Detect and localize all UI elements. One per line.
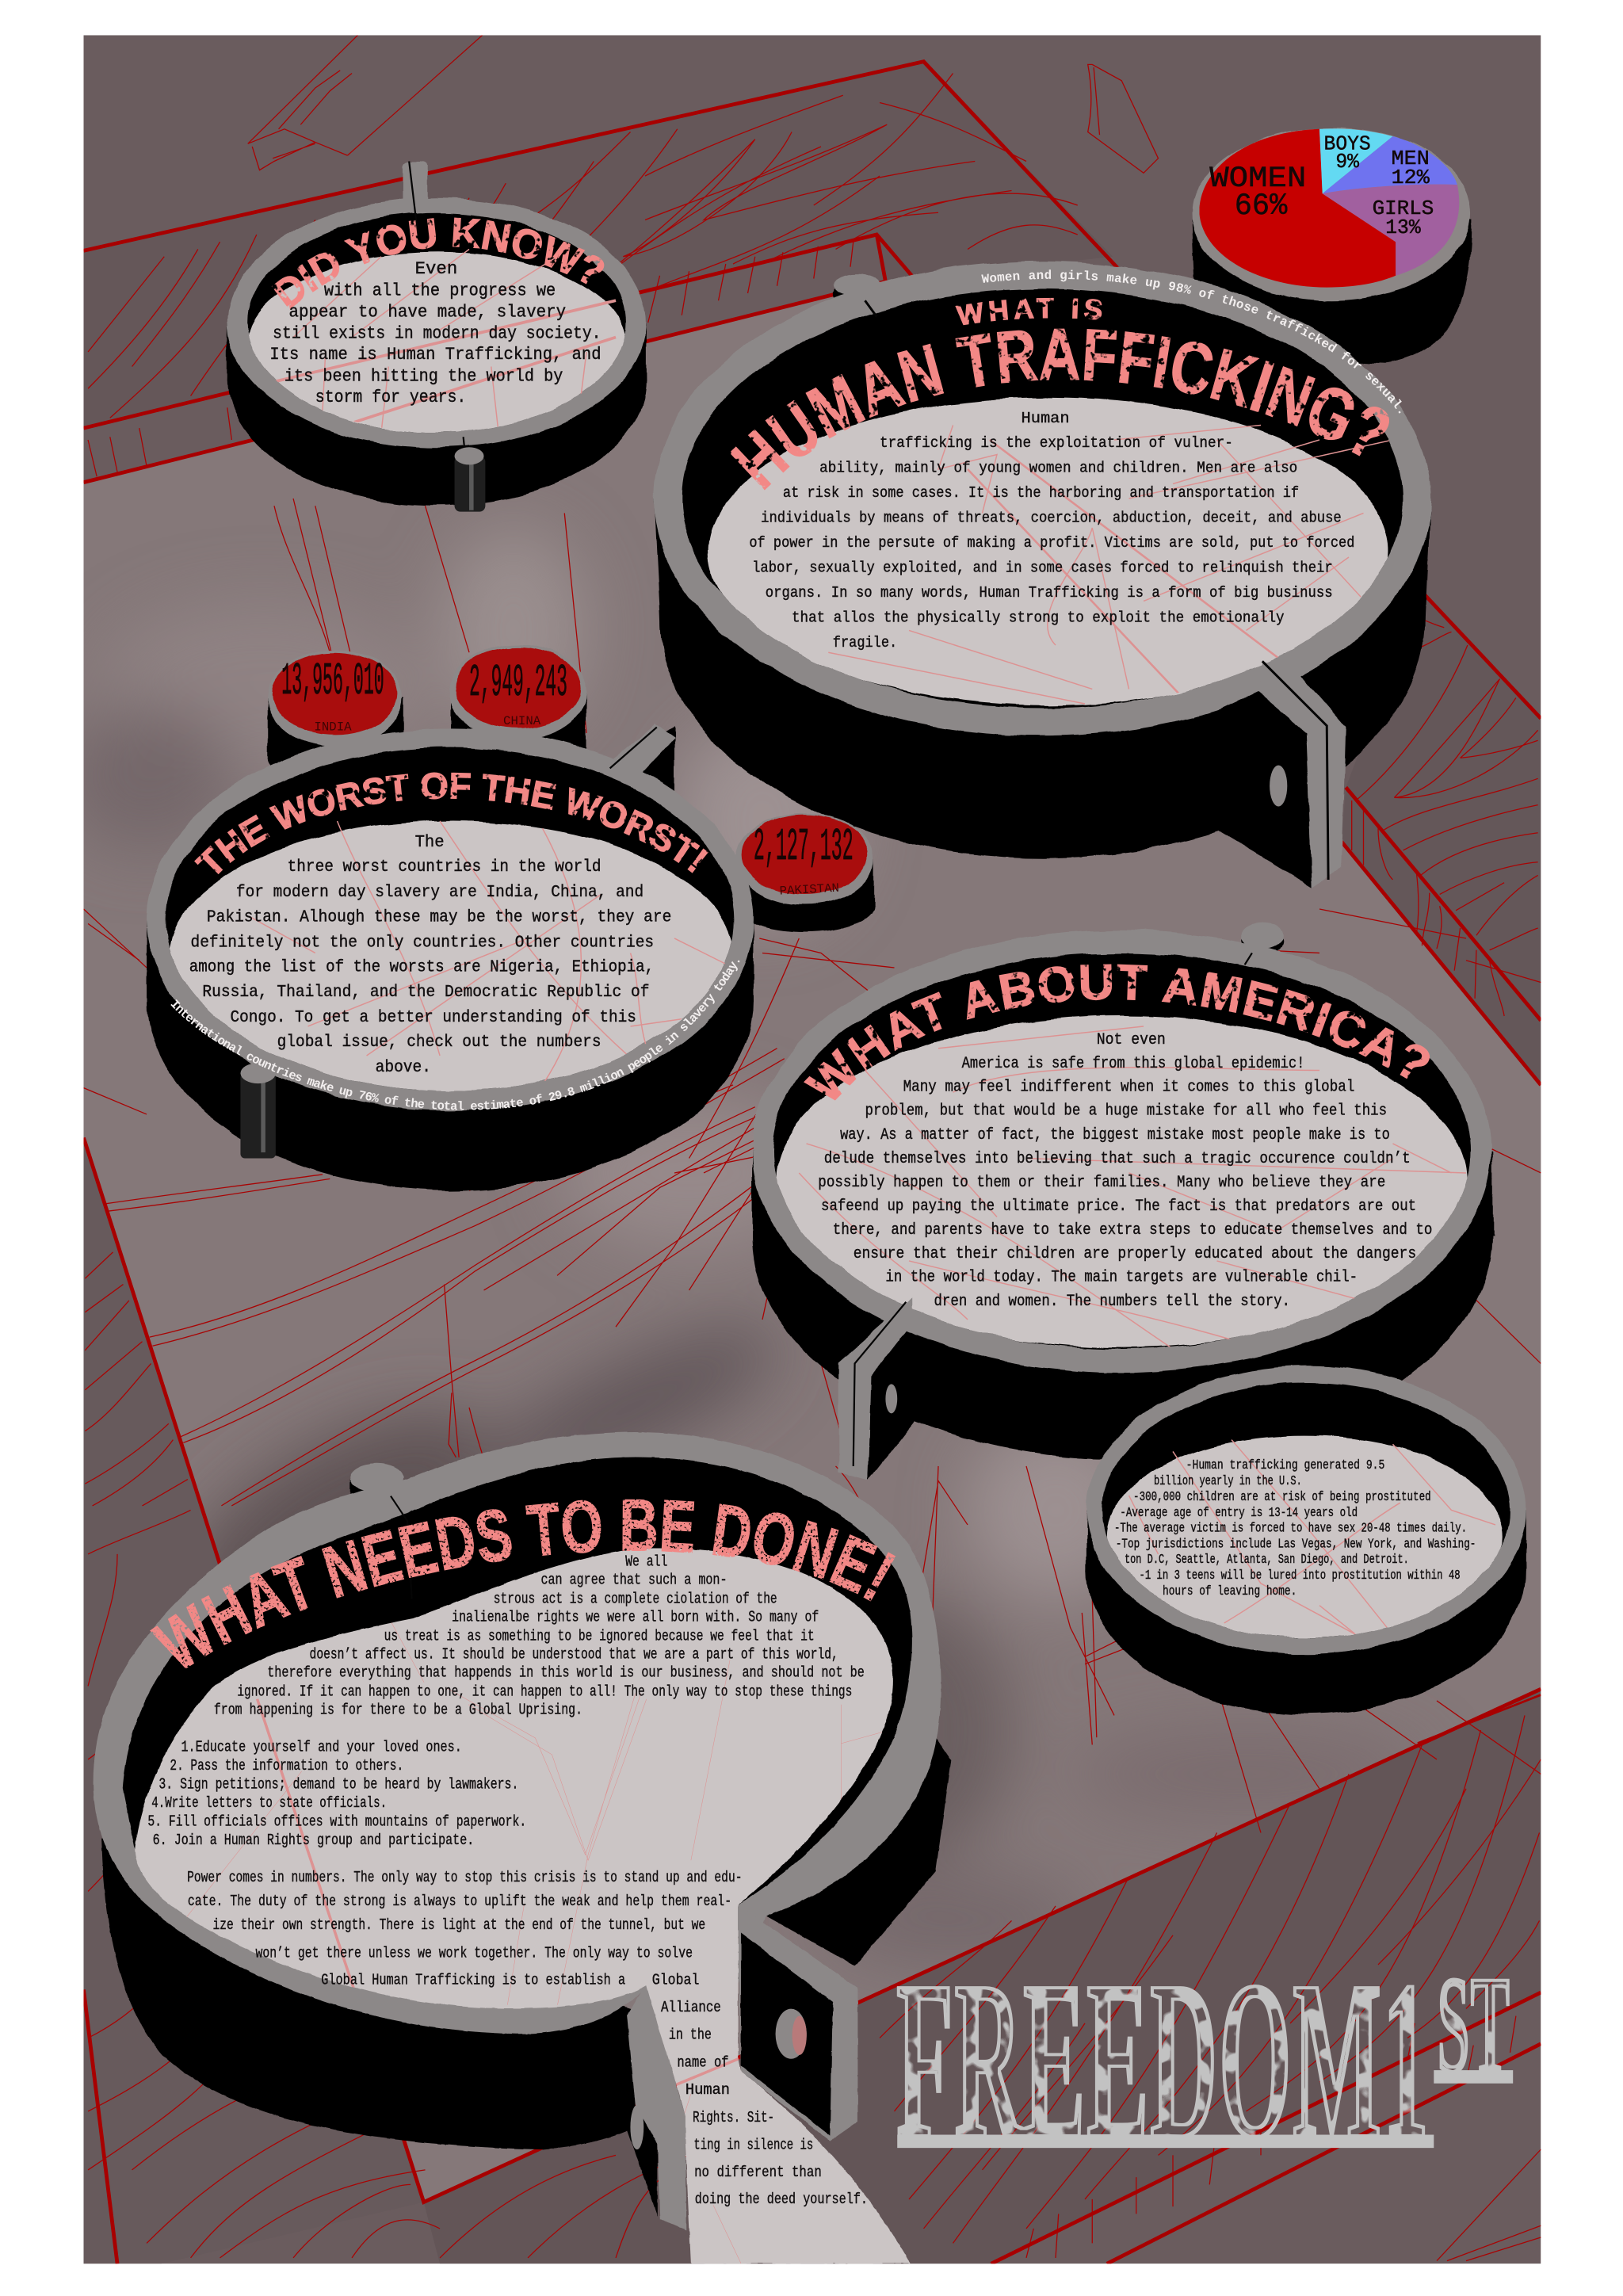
pie labels: 13% [1385, 216, 1421, 239]
body text: among the list of the worsts are Nigeria, Ethiopia, [189, 958, 654, 977]
body text: for modern day slavery are India, China, and [236, 883, 643, 902]
body text: at risk in some cases. It is the harboring and transportation if [783, 484, 1299, 502]
body text: organs. In so many words, Human Trafficking is a form of big businuss [766, 584, 1333, 602]
body text: fragile. [833, 634, 897, 651]
heading: DID YOU KNOW? [271, 217, 604, 309]
body text: ize their own strength. There is light at the end of the tunnel, but we [212, 1916, 705, 1934]
body text: cate. The duty of the strong is always to uplift the weak and help them real- [188, 1893, 731, 1910]
rim caption: Women and girls make up 98% of those trafficked for sexual. [981, 269, 1402, 414]
small heading: what is: WHAT IS [955, 298, 1102, 325]
body text: no different than [694, 2164, 822, 2181]
body text: 2. Pass the information to others. [170, 1757, 403, 1775]
body text: -Average age of entry is 13-14 years old [1120, 1505, 1358, 1520]
body text: Its name is Human Trafficking, and [269, 345, 601, 365]
heading: THE WORST OF THE WORST! [194, 772, 708, 875]
body text: Global [652, 1972, 699, 1989]
body text: 3. Sign petitions; demand to be heard by lawmakers. [158, 1776, 518, 1794]
body text [269, 259, 601, 407]
body text: billion yearly in the U.S. [1154, 1473, 1302, 1488]
ring: statistics [1086, 1366, 1526, 1714]
body text: inalienalbe rights we were all born with. So many of [452, 1609, 819, 1626]
body text: doesn’t affect us. It should be understood that we are a part of this world, [310, 1646, 838, 1664]
body text [147, 1553, 868, 2208]
panel: the worst of the worst [146, 724, 754, 1192]
body text: therefore everything that happends in this world is our business, and should not be [267, 1664, 865, 1682]
body text: Human [1022, 410, 1070, 427]
body text: way. As a matter of fact, the biggest mistake most people make is to [840, 1126, 1390, 1144]
body text: Global Human Trafficking is to establish a [321, 1972, 625, 1989]
body text: Alliance [661, 1999, 721, 2016]
body text: -The average victim is forced to have sex 20-48 times daily. [1114, 1520, 1467, 1535]
panel: america statistics [1086, 1366, 1526, 1714]
pie labels: MEN [1392, 147, 1430, 170]
body text: 6. Join a Human Rights group and participate. [153, 1832, 474, 1849]
body text: appear to have made, slavery [288, 303, 566, 323]
body text: definitely not the only countries. Other countries [191, 933, 654, 952]
body text: still exists in modern day society. [273, 323, 601, 343]
body text: Russia, Thailand, and the Democratic Republic of [202, 983, 650, 1002]
body text: of power in the persute of making a profit. Victims are sold, put to forced [749, 534, 1354, 552]
peg [455, 447, 485, 512]
body text: doing the deed yourself. [695, 2191, 868, 2208]
body text: Not even [1097, 1031, 1166, 1049]
body text [1114, 1457, 1476, 1599]
heading: WHAT ABOUT AMERICA? [804, 964, 1430, 1100]
body text [749, 410, 1354, 651]
stat: india: INDIA [314, 720, 352, 734]
rim caption: International countries make up 76% of the total estimate of 29.8 million people in slavery today. [170, 961, 740, 1110]
body text: -300,000 children are at risk of being prostituted [1133, 1489, 1431, 1504]
pie labels: 66% [1235, 189, 1288, 223]
body text: delude themselves into believing that such a tragic occurence couldn’t [824, 1150, 1411, 1168]
body text: 5. Fill officials offices with mountains of paperwork. [147, 1813, 526, 1831]
body text: ability, mainly of young women and children. Men are also [819, 460, 1297, 477]
panel: what is human trafficking [653, 231, 1432, 888]
body text [189, 833, 671, 1077]
body text: with all the progress we [324, 281, 556, 301]
body text: individuals by means of threats, coercion, abduction, deceit, and abuse [761, 510, 1342, 527]
body text: in the world today. The main targets are vulnerable chil- [885, 1269, 1358, 1287]
body text: can agree that such a mon- [540, 1572, 727, 1589]
body text: America is safe from this global epidemic! [962, 1055, 1305, 1073]
body text: above. [376, 1058, 431, 1077]
body text: Power comes in numbers. The only way to stop this crisis is to stand up and edu- [187, 1869, 742, 1886]
body text: strous act is a complete ciolation of the [494, 1590, 777, 1607]
body text: hours of leaving home. [1163, 1584, 1296, 1599]
body text: Many may feel indifferent when it comes to this global [903, 1078, 1354, 1096]
big heading: human trafficking: HUMAN TRAFFICKING? [731, 328, 1389, 490]
body text: three worst countries in the world [288, 858, 601, 877]
body text: global issue, check out the numbers [277, 1033, 601, 1052]
body text: storm for years. [315, 388, 466, 407]
peg [240, 1063, 276, 1158]
body text: ton D.C, Seattle, Atlanta, San Diego, and Detroit. [1125, 1552, 1409, 1567]
text: ST [1437, 1947, 1510, 2103]
body text: 1.Educate yourself and your loved ones. [181, 1739, 462, 1756]
body text: Even [415, 259, 457, 279]
slice: women 66% [1199, 129, 1396, 288]
body text: The [415, 833, 445, 852]
slice: boys 9% [1319, 128, 1392, 193]
panel: what about america [751, 923, 1495, 1480]
body text: ensure that their children are properly educated about the dangers [854, 1245, 1416, 1263]
body text: dren and women. The numbers tell the story. [934, 1293, 1290, 1311]
ring: america [752, 923, 1492, 1480]
stat: china [449, 644, 586, 774]
body text: there, and parents have to take extra steps to educate themselves and to [833, 1221, 1432, 1240]
body text: Congo. To get a better understanding of this [231, 1008, 636, 1027]
body text: We all [625, 1553, 667, 1570]
slice: men 12% [1323, 136, 1457, 193]
stat: pakistan: PAKISTAN [779, 881, 839, 899]
body text: problem, but that would be a huge mistake for all who feel this [865, 1102, 1387, 1121]
body text: in the [669, 2026, 712, 2043]
pie labels: GIRLS [1373, 197, 1434, 220]
pie labels: 9% [1335, 150, 1359, 174]
body text: Human [685, 2081, 730, 2099]
text: 2,949,243 [469, 658, 567, 709]
text: 2,127,132 [754, 822, 854, 873]
body text: from happening is for there to be a Global Uprising. [214, 1702, 582, 1719]
ring: what needs to be done [94, 1432, 951, 2264]
body text: trafficking is the exploitation of vulner- [880, 434, 1233, 452]
body text: -Human trafficking generated 9.5 [1186, 1457, 1384, 1473]
body text: possibly happen to them or their families. Many who believe they are [818, 1174, 1385, 1192]
body text: ting in silence is [693, 2136, 813, 2153]
pie labels: 12% [1392, 166, 1430, 189]
body text: won’t get there unless we work together. The only way to solve [255, 1944, 693, 1962]
body text [818, 1031, 1432, 1311]
body text: -1 in 3 teens will be lured into prostitution within 48 [1139, 1568, 1461, 1583]
pie chart: who is trafficked [1192, 128, 1472, 364]
slice: girls 13% [1323, 185, 1459, 276]
pie labels [1209, 132, 1434, 239]
body text: its been hitting the world by [285, 366, 563, 386]
stat: pakistan [736, 814, 874, 933]
body text: 4.Write letters to state officials. [151, 1794, 387, 1812]
ring: worst [147, 723, 754, 1190]
ring: human trafficking [654, 261, 1431, 887]
body text: us treat is as something to be ignored because we feel that it [384, 1627, 815, 1645]
heading: WHAT NEEDS TO BE DONE! [150, 1499, 896, 1669]
text: 13,956,010 [281, 656, 384, 708]
pie labels: BOYS [1324, 132, 1371, 156]
body text: -Top jurisdictions include Las Vegas, New York, and Washing- [1116, 1536, 1476, 1551]
body text: Pakistan. Alhough these may be the worst, they are [207, 908, 671, 927]
body text: name of [677, 2054, 729, 2072]
body text: Rights. Sit- [693, 2109, 774, 2126]
body text: labor, sexually exploited, and in some cases forced to relinquish their [752, 559, 1333, 576]
body text: that allos the physically strong to exploit the emotionally [792, 609, 1285, 626]
stat: china: CHINA [503, 714, 541, 728]
panel: what needs to be done [94, 1432, 951, 2264]
panel: did you know [225, 161, 647, 512]
body text: safeend up paying the ultimate price. The fact is that predators are out [821, 1198, 1416, 1216]
body text: ignored. If it can happen to one, it can happen to all! The only way to stop these things [237, 1683, 852, 1701]
stat: india [267, 650, 403, 783]
pie labels: WOMEN [1209, 162, 1306, 196]
ring: did you know [227, 161, 647, 506]
